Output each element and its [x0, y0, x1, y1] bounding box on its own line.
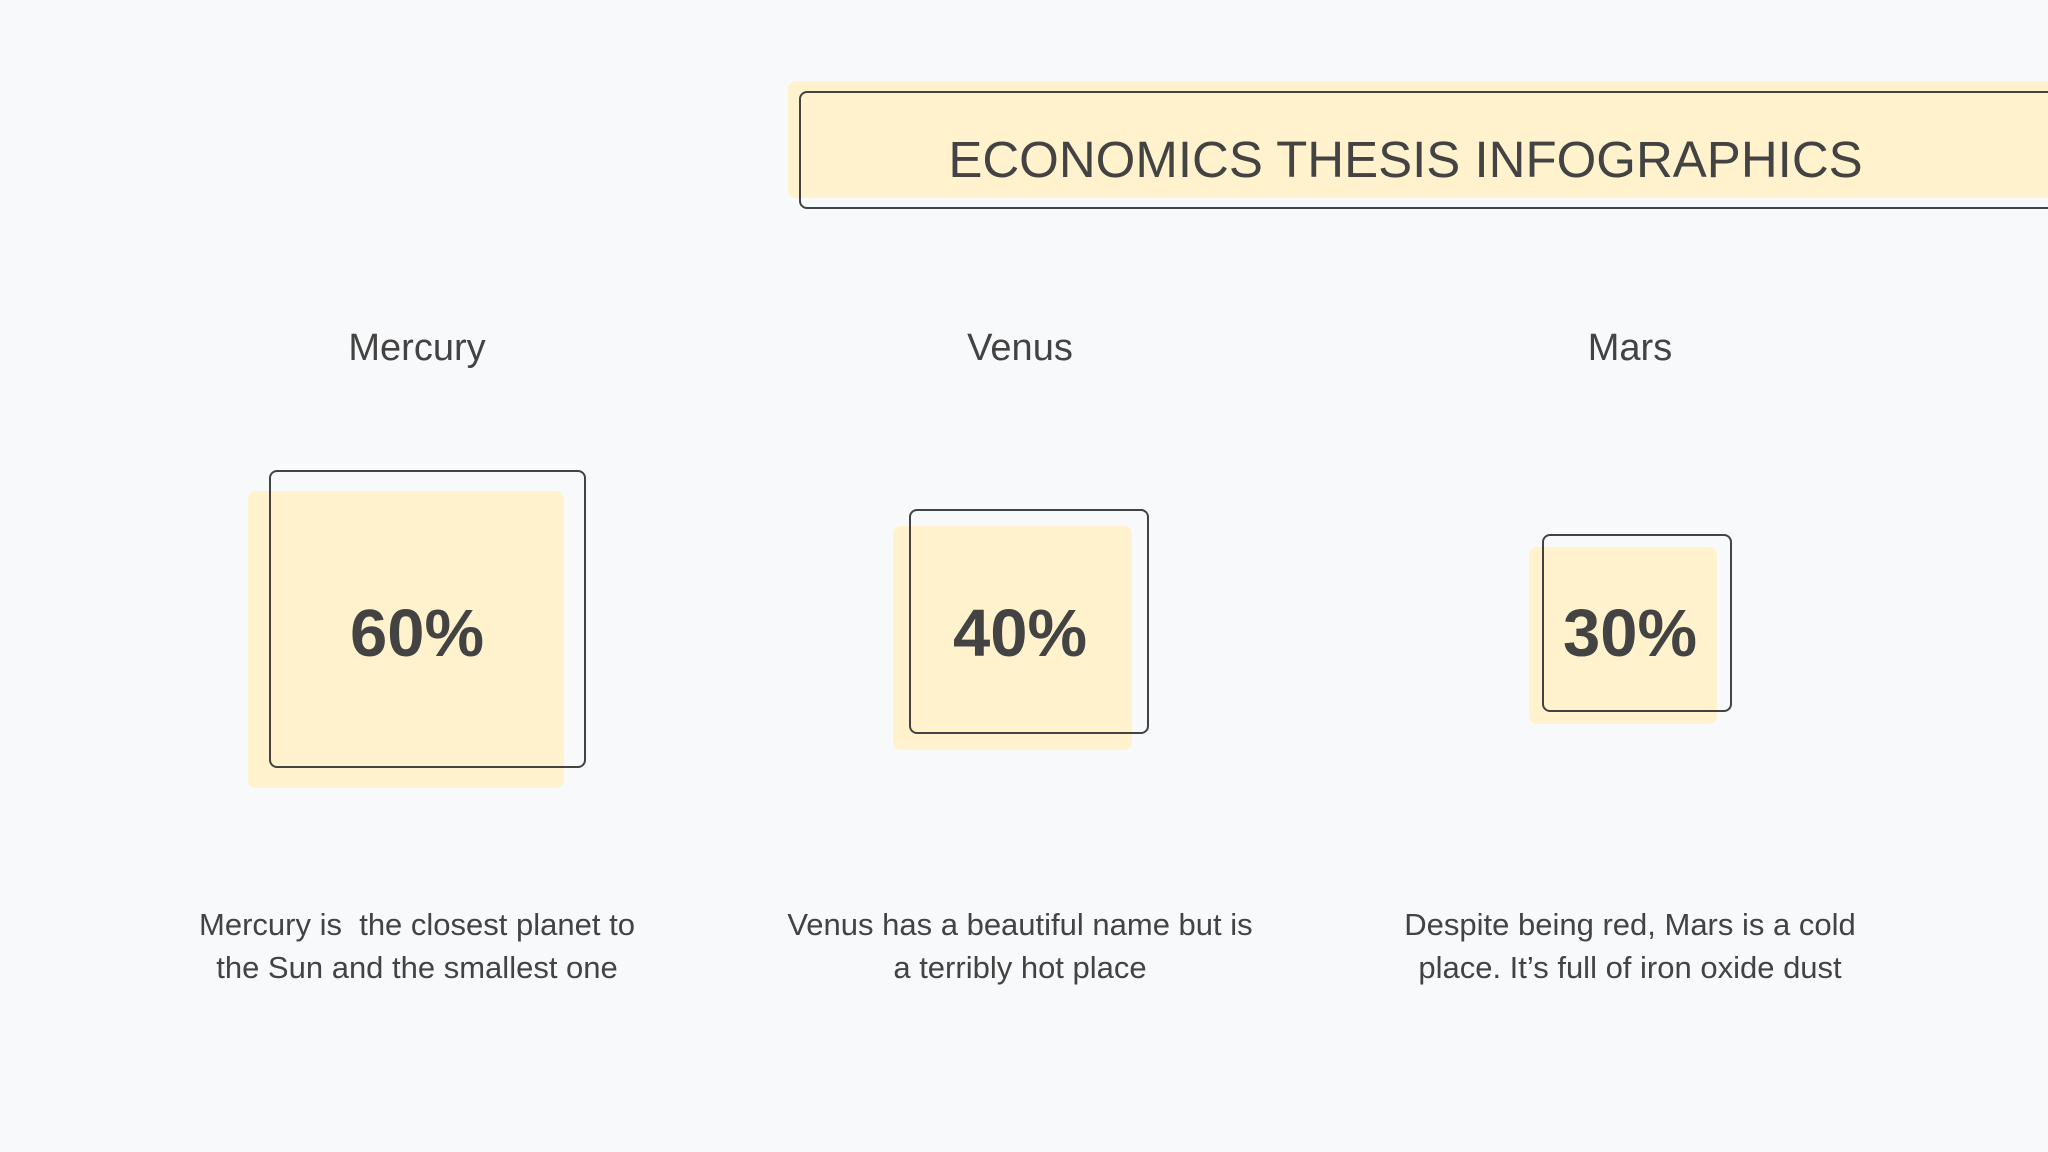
label: Mercury: Mercury	[348, 327, 486, 369]
description: Mercury	[199, 907, 635, 985]
box: Mars 30%	[1529, 534, 1732, 724]
value: 40%: 40%	[953, 596, 1087, 671]
description: Mars: place. It’s full of iron oxide dust	[1418, 950, 1842, 985]
title: ECONOMICS THESIS INFOGRAPHICS	[948, 131, 1863, 188]
box: Venus 40%	[893, 509, 1149, 750]
value: 30%: 30%	[1563, 596, 1697, 671]
label: Venus: Venus	[967, 327, 1073, 369]
description: Venus: Venus has a beautiful name but is	[787, 907, 1253, 942]
description: Mercury: Mercury is the closest planet to	[199, 907, 635, 942]
box: Mercury 60%	[248, 470, 586, 788]
description: Mars	[1404, 907, 1856, 985]
description: Venus	[787, 907, 1253, 985]
description: Venus: a terribly hot place	[893, 950, 1147, 985]
value: 60%: 60%	[350, 596, 484, 671]
description: Mars: Despite being red, Mars is a cold	[1404, 907, 1856, 942]
label: Mars: Mars	[1588, 327, 1672, 369]
description: Mercury: the Sun and the smallest one	[216, 950, 618, 985]
title banner	[788, 81, 2048, 209]
